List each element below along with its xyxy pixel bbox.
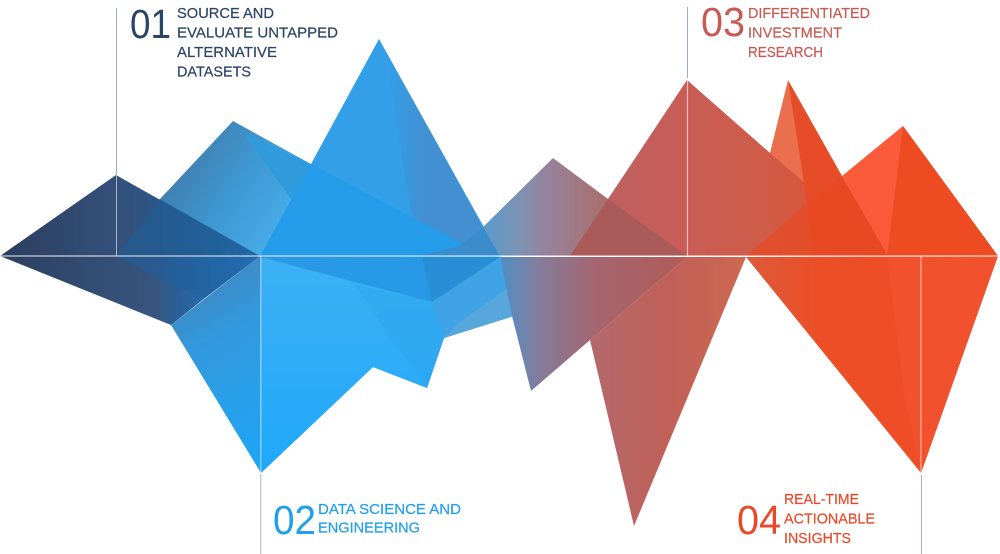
shape: faceted blue mountains: [120, 39, 687, 256]
step 04 label: 04: [737, 497, 781, 543]
step 04 label: ACTIONABLE: [784, 512, 875, 528]
step 03 label: RESEARCH: [748, 45, 823, 61]
step 04 label: INSIGHTS: [784, 531, 851, 547]
step 03 label: DIFFERENTIATED: [748, 6, 870, 22]
step 01 label: EVALUATE UNTAPPED: [177, 26, 338, 42]
step 02 label: 02: [273, 497, 316, 543]
step 04 label: [737, 492, 875, 547]
shape: transitional purple and red facets: [500, 80, 998, 526]
shape: orange peaks and lower wedge: [746, 80, 998, 473]
step 03 label: 03: [701, 0, 745, 45]
step 03 label: INVESTMENT: [748, 26, 842, 42]
step 03 label: [701, 0, 870, 61]
step 04 label: REAL-TIME: [784, 492, 859, 508]
step 01 label: 01: [130, 1, 171, 47]
step 02 label: DATA SCIENCE AND: [318, 502, 461, 518]
shape: dark navy triangles: [0, 175, 260, 325]
step 01 label: SOURCE AND: [177, 6, 274, 22]
step 01 label: ALTERNATIVE: [177, 45, 277, 61]
step 01 label: [130, 1, 338, 80]
step 02 label: ENGINEERING: [318, 520, 420, 536]
step 01 label: DATASETS: [177, 64, 251, 80]
step 02 label: [273, 497, 461, 543]
shape: lower blue facets: [171, 256, 514, 473]
